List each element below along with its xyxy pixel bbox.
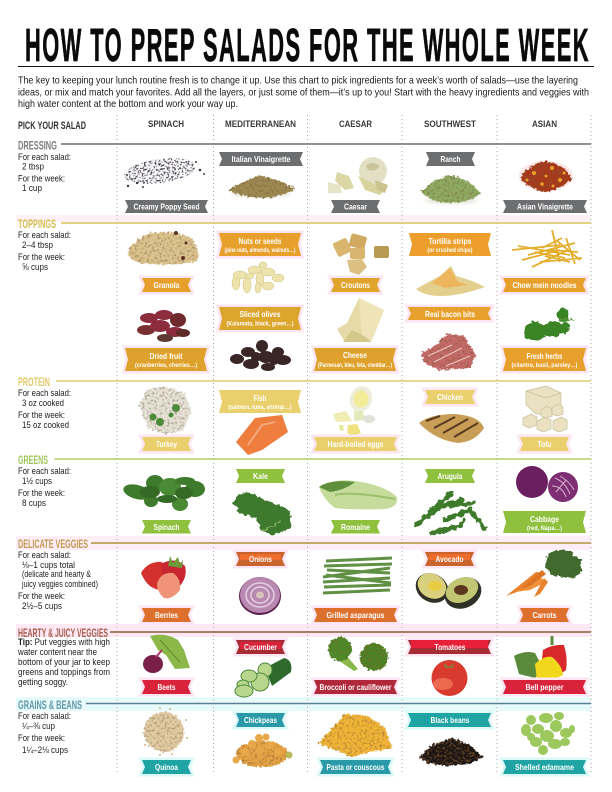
label: Spinach: Spinach <box>154 522 180 532</box>
food: chili flakes <box>519 161 573 192</box>
food: hard-boiled eggs <box>333 383 376 436</box>
label: Turkey <box>142 437 191 451</box>
food: ranch herbs <box>421 175 481 204</box>
label: Granola <box>142 278 191 292</box>
section: delicate veggies: juicy veggies combined) <box>21 579 98 590</box>
section: hearty and juicy veggies: greens and toppings from <box>18 667 110 678</box>
section: hearty and juicy veggies <box>17 626 591 688</box>
food: kale <box>233 491 291 535</box>
section: delicate veggies: 2½–5 cups <box>22 601 62 612</box>
food: croutons <box>332 233 389 275</box>
label: Fresh herbs <box>503 348 586 371</box>
section tint bands <box>16 215 591 711</box>
label: Chickpeas <box>236 713 285 727</box>
label: Sliced olives: (Kalamata, black, green…) <box>226 322 294 328</box>
food: broccoli <box>328 637 388 671</box>
label: Cucumber: Cucumber <box>244 642 278 652</box>
label: Creamy Poppy Seed: Creamy Poppy Seed <box>134 202 200 212</box>
label: Sliced olives: Sliced olives <box>240 309 281 319</box>
section: protein: 3 oz cooked <box>22 398 64 409</box>
label: Nuts or seeds: (pine nuts, almonds, walnuts…) <box>224 248 296 254</box>
food: tomato <box>432 660 468 696</box>
section: grains and beans: 1¼–2⅛ cups <box>22 745 68 756</box>
food: romaine <box>319 480 397 509</box>
section: delicate veggies: For each salad: <box>18 550 71 561</box>
label: Carrots: Carrots <box>532 610 557 620</box>
section: delicate veggies <box>18 537 591 612</box>
food: asparagus <box>323 558 392 593</box>
section: protein: For each salad: <box>18 388 71 399</box>
section: protein: For the week: <box>18 410 65 421</box>
label: Chow mein noodles: Chow mein noodles <box>512 280 577 290</box>
food: garlic <box>328 157 388 195</box>
label: Fresh herbs: (cilantro, basil, parsley…) <box>512 363 578 369</box>
food: spinach <box>122 475 205 511</box>
label: Broccoli or cauliflower: Broccoli or cauliflower <box>320 682 392 692</box>
food: turkey <box>139 386 191 435</box>
section: delicate veggies: ⅛–1 cups total <box>22 560 75 571</box>
column headers: SOUTHWEST <box>424 119 476 130</box>
section: greens: 8 cups <box>22 498 46 509</box>
label: Ranch <box>426 152 475 166</box>
label: Caesar: Caesar <box>344 202 368 212</box>
label: Chicken: Chicken <box>437 392 463 402</box>
food: beets <box>143 635 190 673</box>
label: Grilled asparagus <box>314 608 397 622</box>
label: Cheese <box>314 348 396 371</box>
label: Cheese: Cheese <box>343 350 367 360</box>
label: Romaine <box>331 520 380 534</box>
food: bell peppers <box>514 636 567 680</box>
food: bacon <box>421 334 476 370</box>
food: pasta <box>318 714 392 757</box>
section: dressing: 2 tbsp <box>22 162 44 172</box>
label: Pasta or couscous: Pasta or couscous <box>326 762 385 772</box>
label: Sliced olives <box>219 307 301 330</box>
food: grilled chicken <box>419 414 484 443</box>
label: Croutons <box>331 278 380 292</box>
section: delicate veggies: For the week: <box>18 591 65 602</box>
section: hearty and juicy veggies: water content near the <box>17 647 97 658</box>
label: Real bacon bits <box>408 307 491 320</box>
food: fresh herbs <box>523 308 575 340</box>
column headers: SPINACH <box>148 119 184 130</box>
food: arugula <box>417 493 484 533</box>
section: toppings <box>18 217 591 273</box>
label: Chicken <box>425 390 475 404</box>
food: pine nuts <box>232 262 284 293</box>
label: Shelled edamame: Shelled edamame <box>515 762 574 772</box>
label: Creamy Poppy Seed <box>125 200 208 213</box>
label: Italian Vinaigrette <box>219 152 303 166</box>
food: black beans <box>419 738 483 766</box>
column headers: PICK YOUR SALAD <box>18 120 86 132</box>
label: Bell pepper: Bell pepper <box>526 682 564 692</box>
food: salmon <box>236 415 288 455</box>
section: grains and beans: ¼–⅜ cup <box>22 721 55 732</box>
section: delicate veggies: (delicate and hearty & <box>22 569 91 580</box>
label: Pasta or couscous <box>320 760 391 774</box>
section: hearty and juicy veggies: Tip: Put veggies with high <box>18 637 110 648</box>
section: protein: 15 oz cooked <box>22 420 69 431</box>
label: Grilled asparagus: Grilled asparagus <box>326 610 385 620</box>
label: Tomatoes <box>408 640 491 654</box>
food: chickpeas <box>232 734 292 767</box>
label: Avocado: Avocado <box>436 554 464 564</box>
label: Chickpeas: Chickpeas <box>244 715 277 725</box>
label: Romaine: Romaine <box>341 522 370 532</box>
label: Turkey: Turkey <box>156 439 177 449</box>
food: cucumber <box>235 658 291 697</box>
label: Kale <box>236 469 285 483</box>
section: protein <box>18 375 591 431</box>
label: Croutons: Croutons <box>341 280 370 290</box>
section: toppings: TOPPINGS <box>18 217 56 231</box>
column headers: MEDITERRANEAN <box>225 119 296 130</box>
label: Quinoa: Quinoa <box>155 762 178 772</box>
food: kalamata olives <box>230 340 291 371</box>
label: Asian Vinaigrette <box>503 200 587 213</box>
label: Ranch: Ranch <box>440 154 460 164</box>
label: Onions: Onions <box>249 554 272 564</box>
intro text: high water content at the bottom and work your way up. <box>18 99 238 110</box>
food: dried cranberries <box>137 310 190 342</box>
label: Carrots <box>520 608 569 622</box>
label: Shelled edamame <box>503 760 586 774</box>
label: Tofu <box>520 437 569 451</box>
section: grains and beans <box>18 698 591 756</box>
section: hearty and juicy veggies: bottom of your jar to keep <box>18 657 110 668</box>
column headers <box>18 119 557 132</box>
section: greens: GREENS <box>18 453 48 467</box>
label: Cabbage: (red, Napa…) <box>527 526 562 532</box>
label: Tortilla strips: (or crushed chips) <box>428 248 472 254</box>
label: Spinach <box>142 520 191 534</box>
section: greens: 1½ cups <box>22 476 52 487</box>
section: toppings: 2–4 tbsp <box>22 240 53 251</box>
label: Fresh herbs: Fresh herbs <box>526 351 563 361</box>
label: Broccoli or cauliflower <box>314 680 397 694</box>
section: grains and beans: For each salad: <box>18 711 71 722</box>
label: Berries <box>142 608 191 622</box>
intro text <box>18 76 589 110</box>
label: Dried fruit: Dried fruit <box>150 351 183 361</box>
label: Caesar <box>331 200 380 213</box>
label: Arugula <box>425 469 475 483</box>
food: tofu <box>523 386 567 432</box>
section: toppings: For each salad: <box>18 230 71 241</box>
label: Tomatoes: Tomatoes <box>434 642 466 652</box>
label: Granola: Granola <box>154 280 180 290</box>
section: greens: For each salad: <box>18 466 71 477</box>
column dividers <box>117 115 591 775</box>
label: Nuts or seeds <box>219 233 301 256</box>
label: Cheese: (Parmesan, bleu, feta, cheddar…) <box>318 363 392 369</box>
label: Beets: Beets <box>158 682 176 692</box>
label: Asian Vinaigrette: Asian Vinaigrette <box>517 202 573 212</box>
section: dressing: For each salad: <box>18 152 71 163</box>
label: Beets <box>142 680 191 694</box>
label: Avocado <box>425 552 474 566</box>
label: Nuts or seeds: Nuts or seeds <box>238 236 282 246</box>
food: red cabbage <box>516 466 578 502</box>
label: Fish <box>219 390 301 413</box>
section: dressing: 1 cup <box>22 183 42 194</box>
label: Italian Vinaigrette: Italian Vinaigrette <box>232 154 291 164</box>
label: Hard-boiled eggs: Hard-boiled eggs <box>328 439 384 449</box>
food: parmesan cheese <box>337 298 384 342</box>
label: Cabbage: Cabbage <box>530 514 559 524</box>
food: chow mein noodles <box>512 230 582 267</box>
section: grains and beans: For the week: <box>18 733 65 744</box>
section: toppings: For the week: <box>18 252 65 263</box>
label: Arugula: Arugula <box>438 471 463 481</box>
label: Black beans: Black beans <box>430 715 470 725</box>
section: hearty and juicy veggies: HEARTY & JUICY VEGGIES <box>18 626 108 640</box>
label: Fish: (salmon, tuna, shrimp…) <box>228 405 292 411</box>
label: Real bacon bits: Real bacon bits <box>425 309 475 319</box>
label: Tortilla strips <box>409 233 491 256</box>
label: Chow mein noodles <box>503 278 586 292</box>
label: Kale: Kale <box>253 471 268 481</box>
label: Hard-boiled eggs <box>314 437 397 451</box>
section: grains and beans: GRAINS & BEANS <box>18 698 82 712</box>
food: avocado <box>410 567 487 615</box>
section: hearty and juicy veggies: getting soggy. <box>18 677 68 688</box>
section: dressing <box>18 138 591 194</box>
section: protein: PROTEIN <box>18 375 50 389</box>
food: italian herbs <box>229 176 295 198</box>
label: Cabbage <box>503 511 586 533</box>
section: toppings: ⅝ cups <box>22 262 48 273</box>
label: Tofu: Tofu <box>538 439 552 449</box>
food: red onion <box>239 577 281 615</box>
label: Cucumber <box>236 640 285 654</box>
label: Tortilla strips: Tortilla strips <box>428 236 472 246</box>
food: granola <box>127 231 198 265</box>
food: tortilla strips <box>416 266 485 296</box>
food: edamame <box>521 712 575 755</box>
section: dressing: For the week: <box>18 174 65 184</box>
food: carrots <box>506 549 581 597</box>
label: Fish: Fish <box>254 393 266 403</box>
label: Berries: Berries <box>155 610 178 620</box>
section: greens <box>18 453 591 509</box>
label: Bell pepper <box>503 680 586 694</box>
label: Quinoa <box>142 760 191 774</box>
section: delicate veggies: DELICATE VEGGIES <box>18 537 88 551</box>
section: greens: For the week: <box>18 488 65 499</box>
label: Onions <box>236 552 285 566</box>
food: strawberries <box>141 556 186 598</box>
column headers: ASIAN <box>532 119 557 130</box>
label: Dried fruit <box>125 348 207 371</box>
label: Dried fruit: (cranberries, cherries…) <box>135 363 197 369</box>
label: Black beans <box>408 713 491 727</box>
food: poppy seeds <box>123 154 205 188</box>
food: quinoa <box>144 707 188 756</box>
column headers: CAESAR <box>339 119 372 130</box>
section: dressing: DRESSING <box>18 138 57 152</box>
